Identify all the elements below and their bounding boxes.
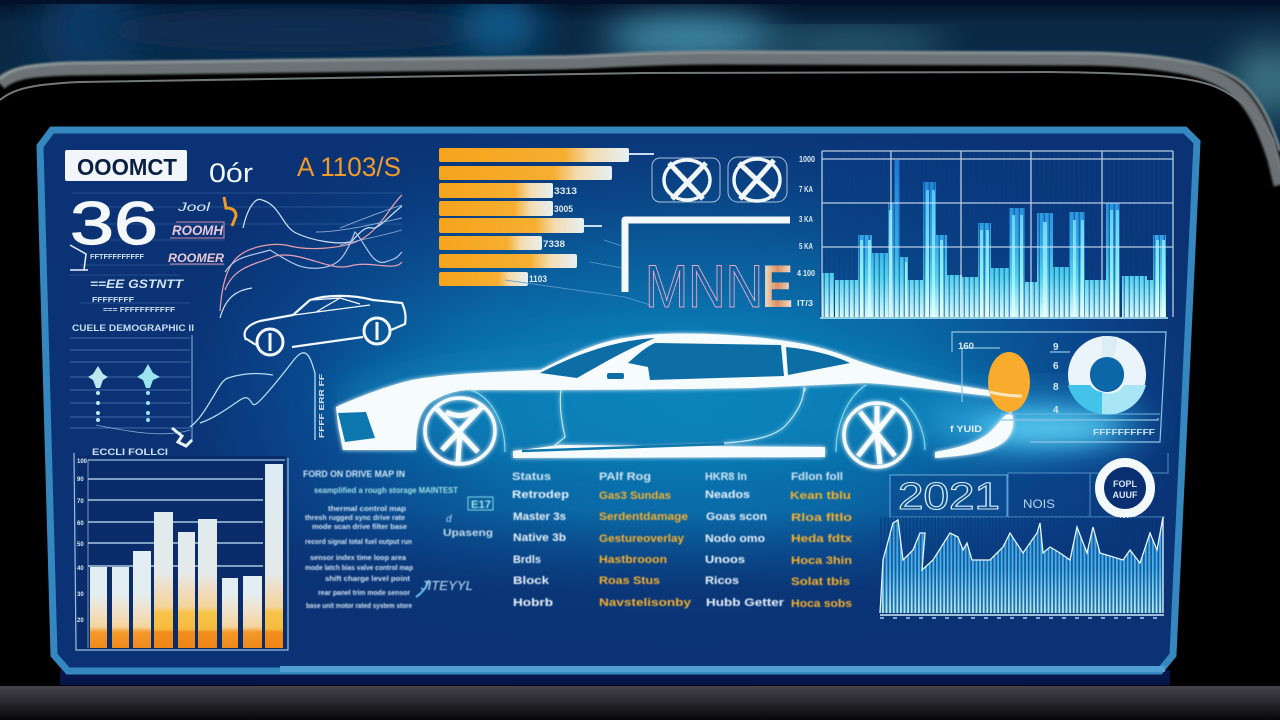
center-left text block: thresh rugged sync drive rate [305,515,405,522]
readout labels: === FFFFFFFFFFF [103,307,176,314]
table column two: Hastbrooon [599,554,667,566]
table column one: Hobrb [513,597,553,609]
table column four: Fdlon foll [791,471,843,483]
line chart curves [220,195,402,318]
table column two: PAlf Rog [599,471,651,483]
side window [628,343,784,380]
circular gauge: AUUF [1112,490,1138,500]
top-left header labels [65,150,401,188]
donut panel: 160 [958,341,974,351]
readout labels: ROOMER [168,251,224,265]
label box: OOOMCT [77,154,177,180]
rear window [786,347,850,375]
front wheel [425,398,495,464]
table column two: Navstelisonby [599,597,692,609]
y-axis ticks: 30 [77,592,84,598]
table column three: Goas scon [706,511,767,523]
table column four [790,471,853,610]
axis labels for column chart [797,155,815,308]
y-axis ticks: 90 [77,477,84,483]
table column four: Heda fdtx [791,533,853,545]
table column four: Hoca sobs [791,598,852,610]
horizontal bar chart [439,148,654,286]
background: blurred sky behind the bezel [0,0,1280,200]
center-left text block: base unit motor rated system store [306,603,412,610]
readout labels: FFTFFFFFFFFF [90,254,145,261]
2021 year panel: NOIS [1023,497,1055,511]
donut panel: FFFFFFFFFF [1093,428,1155,437]
y-axis ticks [77,459,88,624]
white frame with MNNE wave label: E [762,253,793,320]
y-axis ticks: 60 [77,521,84,527]
bar value labels: 1103 [529,274,547,284]
axis glyphs: 9 [1053,342,1059,353]
small car outline [245,296,406,355]
vertical bar chart bottom-left [74,447,288,650]
readout labels: FFFFFFFF [92,297,135,304]
axis labels for column chart: 5 KA [799,242,813,251]
bright bar cores [860,190,1165,317]
mirror [607,373,624,379]
white frame with MNNE wave label: MNN [645,253,763,320]
sill [513,445,825,458]
table column two: Gas3 Sundas [599,490,671,502]
table column three: Hubb Getter [706,597,785,609]
center-left text block: record signal total fuel output run [305,539,412,546]
axis labels for column chart: 7 KA [799,185,813,194]
donut panel: f YUID [950,424,983,434]
lower-left line diagram [70,335,326,446]
table column two: Gestureoverlay [599,533,685,545]
table column one: Native 3b [513,532,566,544]
bar value labels: 3313 [554,186,577,196]
table column four: Solat tbis [791,576,850,588]
windshield [540,338,655,378]
upper-left readout and line chart [70,190,402,334]
vertical labels: FFFF ERR FF [319,373,326,438]
big number: 36 [70,190,158,257]
table column three: Neados [705,489,750,501]
table column one [512,471,569,609]
readout labels: ROOMH [172,222,224,238]
bar value labels [529,186,577,284]
readout labels: CUELE DEMOGRAPHIC II [72,323,194,334]
table column three: Unoos [705,554,745,566]
center-left text block: d [446,514,452,525]
icon: fan right [728,157,787,202]
center-left text block: Upaseng [443,528,493,539]
small reading: 0ór [209,158,253,188]
front light cutout [338,412,375,442]
fan icons [652,157,787,202]
axis glyphs: 8 [1053,382,1059,393]
center-left text block: mode latch bias valve control map [305,565,413,572]
marker left [88,366,108,422]
door lines [554,387,806,446]
bar value labels: 7338 [543,239,565,249]
column chart top-right [820,150,1174,318]
y-axis ticks: 70 [77,499,84,505]
table column two: Serdentdamage [599,511,688,523]
readout labels: Jool [177,200,210,214]
car body [336,334,1022,450]
marker right [137,364,160,422]
y-axis ticks: 20 [77,618,84,624]
2021 year panel: 2021 [898,476,1000,518]
rear wheel [844,403,910,467]
center-left text block: seamplified a rough storage MAINTEST [314,486,458,495]
axis glyphs [1053,342,1059,416]
axis glyphs: 6 [1053,361,1059,372]
circular gauge [1100,462,1150,514]
axis labels for column chart: 4 100 [797,269,815,278]
bar value labels: 3005 [554,204,573,214]
bars [90,464,283,648]
chart title: ECCLI FOLLCI [92,447,168,457]
wheel arches [470,385,925,452]
curves [96,353,315,440]
table column two: Roas Stus [599,575,660,587]
axis labels for column chart: 1000 [799,155,815,164]
y-axis ticks: 100 [77,459,88,465]
y-axis ticks: 50 [77,542,84,548]
orange ellipse [988,352,1030,412]
circular gauge: FOPL [1113,479,1138,489]
center-left text block: rear panel trim mode sensor [318,590,410,597]
rear bumper [935,412,1013,458]
2021 year panel [890,453,1168,518]
table column one: Retrodep [512,489,569,501]
table column three: Nodo omo [705,533,765,545]
table column one: Brdls [513,554,541,566]
table column three: HKR8 In [705,471,747,483]
white frame with MNNE wave label [505,220,793,320]
table column four: Kean tblu [790,490,851,502]
table column four: Rloa fltlo [791,512,852,524]
center-left text block: sensor index time loop area [310,555,406,562]
axis labels for column chart: IT/3 [797,299,814,308]
axis labels for column chart: 3 KA [799,215,813,224]
area chart bottom-right [880,517,1164,618]
corner glyphs [172,428,192,446]
floor strip below the monitor [0,686,1280,720]
orange reading: A 1103/S [297,152,401,182]
table column three [705,471,785,609]
table column one: Block [513,575,550,587]
main car silhouette [336,334,1022,467]
readout labels: ==EE GSTNTT [90,277,185,291]
screen panel [40,130,1197,685]
donut panel [950,332,1166,442]
center-left text block: thermal control map [328,506,406,513]
center-left text block: mode scan drive filter base [312,524,407,531]
center-left text block [303,469,493,610]
center-left text block: E17 [471,499,491,511]
table column three: Ricos [705,575,739,587]
y-axis ticks: 40 [77,566,84,572]
axis glyphs: 4 [1053,405,1059,416]
table column one: Master 3s [513,511,566,523]
center-left text block: FORD ON DRIVE MAP IN [303,469,405,479]
data table [512,471,853,610]
table column one: Status [512,471,551,483]
table column four: Hoca 3hin [791,555,852,567]
center-left text block: JITEYYL [420,578,473,593]
icon: fan left [652,158,720,202]
readout labels [70,197,236,334]
table column two [599,471,692,609]
donut chart [1068,336,1146,414]
center-left text block: shift charge level point [325,576,411,583]
